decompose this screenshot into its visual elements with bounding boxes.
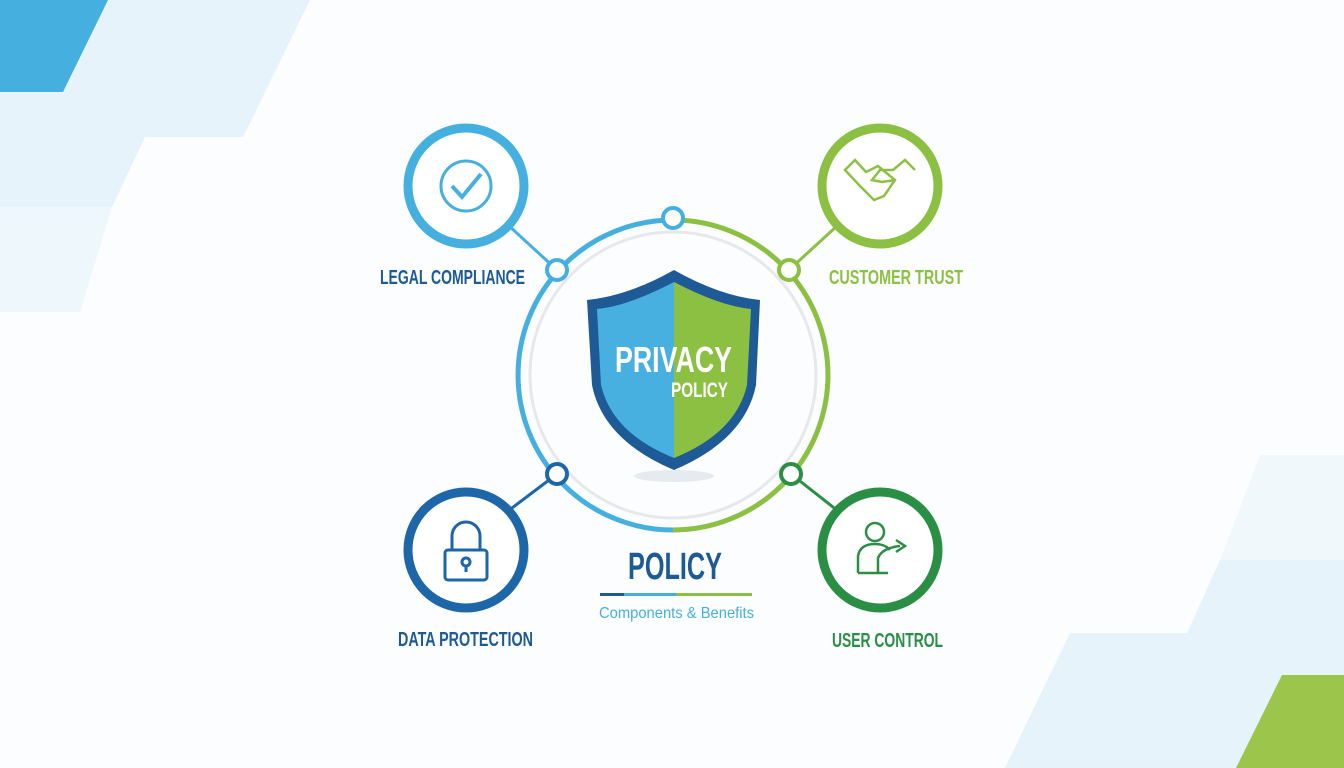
connectors <box>508 225 838 511</box>
icon: check <box>441 161 491 211</box>
data protection: DATA PROTECTION <box>398 629 533 651</box>
icon: handshake <box>845 160 915 200</box>
legal compliance: LEGAL COMPLIANCE <box>380 267 525 289</box>
icon: lock <box>445 522 487 580</box>
data protection <box>398 492 533 651</box>
shield: POLICY <box>671 379 728 402</box>
user control: USER CONTROL <box>832 630 943 652</box>
icon: user arrow <box>858 523 905 573</box>
node dots <box>547 208 801 484</box>
user control <box>822 492 943 652</box>
shield text: PRIVACY <box>615 339 732 380</box>
legal compliance <box>380 128 525 289</box>
title POLICY <box>599 546 754 622</box>
title POLICY: POLICY <box>628 546 722 588</box>
customer trust: CUSTOMER TRUST <box>829 267 963 289</box>
shield <box>587 270 760 482</box>
title POLICY: Components & Benefits <box>599 605 754 622</box>
background shapes top-left <box>0 0 310 312</box>
background shapes bottom-right <box>1005 455 1344 768</box>
main ring <box>518 220 828 530</box>
customer trust <box>822 128 963 289</box>
